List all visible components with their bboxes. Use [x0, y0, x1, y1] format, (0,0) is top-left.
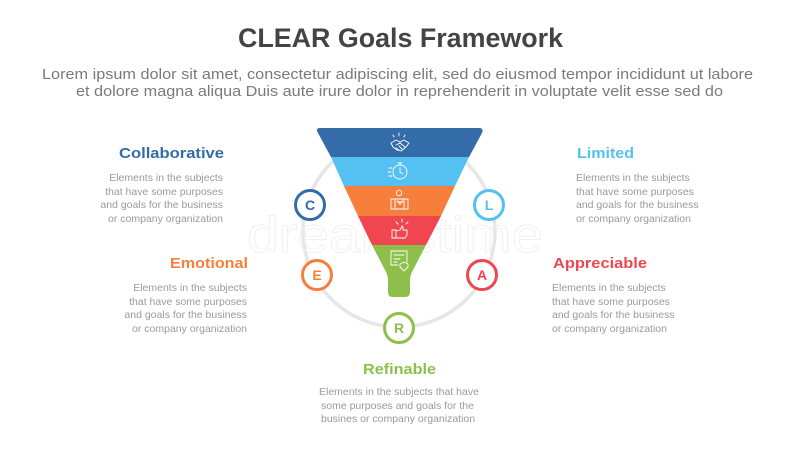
funnel band: appreciable: [358, 216, 441, 245]
badge: C: C: [305, 197, 315, 213]
ring connecting the letter badges: [303, 135, 495, 327]
icon: person with heart: [391, 190, 408, 209]
text block: Refinable: busines or company organization: [321, 413, 475, 425]
text block: Appreciable: [552, 255, 675, 335]
subtitle: Lorem ipsum dolor sit amet, consectetur adipiscing elit, sed do eiusmod tempor incididunt ut labore: [42, 66, 753, 83]
badge: A: [468, 260, 496, 290]
icon: handshake: [391, 133, 409, 151]
text block: Limited: and goals for the business: [576, 199, 699, 211]
text block: Collaborative: Elements in the subjects: [109, 172, 223, 184]
text block: Refinable: [319, 361, 479, 425]
funnel band: collaborative: [317, 128, 483, 157]
subtitle: et dolore magna aliqua Duis aute irure dolor in reprehenderit in voluptate velit esse sed do: [76, 83, 723, 100]
text block: Emotional: Elements in the subjects: [133, 282, 247, 294]
watermark: dreamstime: [247, 207, 543, 263]
text block: Appreciable: and goals for the business: [552, 309, 675, 321]
badge: L: [474, 190, 504, 220]
badge: C: [296, 190, 324, 220]
text block: Emotional: Emotional: [170, 255, 248, 272]
text block: Emotional: or company organization: [132, 323, 247, 335]
funnel: [317, 128, 483, 297]
title: CLEAR Goals Framework: [238, 23, 564, 53]
text block: Limited: Limited: [577, 145, 634, 162]
text block: Collaborative: that have some purposes: [105, 186, 223, 198]
badge: E: [302, 260, 332, 290]
icon: checklist with shield: [391, 251, 408, 271]
text block: Collaborative: [100, 145, 224, 225]
badge: L: L: [485, 197, 494, 213]
text block: Refinable: Elements in the subjects that have: [319, 386, 479, 398]
text block: Collaborative: or company organization: [108, 213, 223, 225]
text block: Emotional: and goals for the business: [124, 309, 247, 321]
badge: R: [384, 314, 414, 342]
text block: Limited: that have some purposes: [576, 186, 694, 198]
icon: thumbs up: [392, 219, 408, 238]
text block: Collaborative: Collaborative: [119, 145, 224, 162]
text block: Emotional: that have some purposes: [129, 296, 247, 308]
badge: E: E: [312, 267, 322, 283]
text block: Appreciable: that have some purposes: [552, 296, 670, 308]
funnel band: emotional: [344, 186, 455, 216]
icon: stopwatch: [388, 163, 407, 179]
funnel band: limited: [331, 157, 469, 186]
text block: Emotional: [124, 255, 248, 335]
text block: Limited: or company organization: [576, 213, 691, 225]
text block: Appreciable: Appreciable: [553, 255, 647, 272]
badge: A: A: [477, 267, 487, 283]
text block: Collaborative: and goals for the business: [100, 199, 223, 211]
text block: Appreciable: Elements in the subjects: [552, 282, 666, 294]
text block: Limited: Elements in the subjects: [576, 172, 690, 184]
text block: Appreciable: or company organization: [552, 323, 667, 335]
text block: Refinable: some purposes and goals for the: [321, 400, 474, 412]
text block: Refinable: Refinable: [363, 361, 436, 378]
text block: Limited: [576, 145, 699, 225]
subtitle: [42, 66, 753, 100]
funnel band: refinable: [372, 245, 426, 297]
badge: R: R: [394, 320, 404, 336]
